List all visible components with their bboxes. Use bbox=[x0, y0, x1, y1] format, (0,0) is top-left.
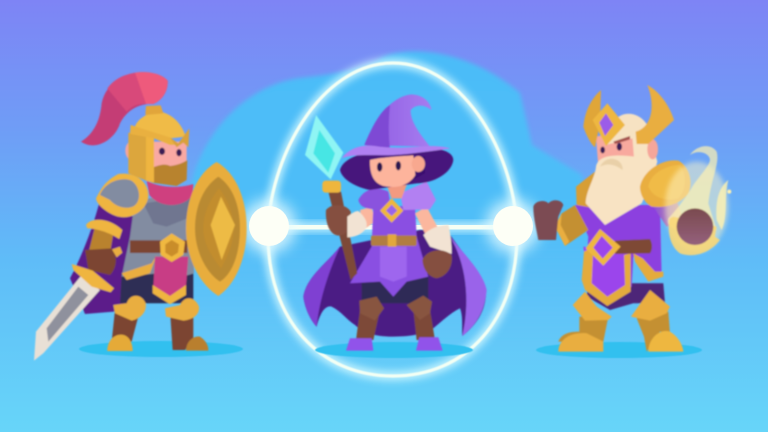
left energy orb bbox=[242, 199, 296, 253]
legs bbox=[587, 283, 665, 310]
belt bbox=[130, 240, 187, 253]
left fist bbox=[533, 200, 563, 240]
knees bbox=[359, 297, 384, 321]
right hand bbox=[422, 250, 452, 278]
neck bbox=[387, 185, 407, 198]
horizontal beam bbox=[268, 222, 513, 232]
staff crystal bbox=[305, 115, 343, 179]
crown gem bbox=[593, 103, 625, 146]
character: paladin bbox=[533, 85, 731, 352]
plume bbox=[81, 73, 168, 145]
character: wizard bbox=[303, 94, 487, 351]
hat brim back bbox=[340, 148, 453, 190]
left cuff bbox=[347, 211, 367, 237]
cape bbox=[303, 230, 486, 337]
right cuff bbox=[423, 225, 452, 254]
fire glow bbox=[665, 162, 728, 252]
right energy orb bbox=[486, 199, 540, 253]
arms bbox=[360, 207, 375, 230]
belt bbox=[615, 239, 652, 254]
head bbox=[596, 128, 635, 167]
boots bbox=[558, 317, 608, 342]
belt bbox=[371, 235, 417, 246]
ring glow bbox=[268, 63, 517, 376]
boots bbox=[346, 338, 373, 351]
ground shadow: warrior bbox=[79, 341, 243, 357]
tunic bbox=[350, 205, 428, 297]
gem belt buckle bbox=[586, 229, 621, 266]
eyes bbox=[159, 148, 165, 155]
legs bbox=[362, 270, 428, 303]
eyes bbox=[600, 147, 605, 153]
shield bbox=[186, 162, 247, 296]
cape bbox=[70, 200, 133, 314]
head bbox=[135, 142, 187, 173]
helmet bbox=[133, 112, 186, 138]
legs bbox=[112, 310, 140, 342]
hair bbox=[410, 157, 425, 182]
right pauldron bbox=[640, 160, 691, 207]
hat cone bbox=[364, 94, 432, 147]
small flame bbox=[716, 180, 728, 230]
scarf bbox=[147, 181, 193, 205]
belt buckle bbox=[160, 233, 185, 262]
shoulder pauldron bbox=[96, 174, 148, 217]
loincloth bbox=[153, 257, 188, 300]
right forearm bbox=[653, 200, 683, 227]
sword guard bbox=[72, 264, 114, 292]
glowing magic ring bbox=[242, 63, 540, 376]
bald crown bbox=[605, 114, 648, 145]
beard bbox=[586, 156, 657, 225]
robe bbox=[575, 205, 662, 305]
collar shoulders bbox=[358, 189, 392, 212]
boots bbox=[107, 335, 133, 351]
hand bbox=[85, 248, 116, 275]
ring line bbox=[268, 63, 517, 376]
main flame bbox=[668, 146, 717, 230]
arm bbox=[88, 227, 113, 253]
flame ring around fist bbox=[669, 217, 720, 255]
blue cloud shape behind the wizard bbox=[180, 51, 600, 340]
sword blade bbox=[34, 275, 100, 361]
face bbox=[370, 155, 415, 187]
spark bbox=[727, 190, 731, 194]
character: warrior bbox=[34, 72, 247, 361]
torso armor bbox=[122, 193, 194, 277]
amulet bbox=[380, 198, 403, 223]
knee guards bbox=[113, 296, 146, 321]
ground shadow: wizard bbox=[315, 342, 473, 358]
left hand bbox=[326, 205, 351, 236]
beard bbox=[152, 160, 187, 186]
knee guards bbox=[573, 292, 612, 321]
right horn bbox=[636, 85, 674, 144]
left arm and shoulder bbox=[576, 172, 595, 208]
eyes bbox=[377, 162, 382, 172]
left horn bbox=[583, 90, 601, 147]
hair band bbox=[632, 127, 657, 170]
ground shadow: paladin bbox=[536, 342, 702, 358]
hat brim bbox=[342, 146, 450, 158]
fire ball fist bbox=[677, 208, 713, 245]
staff bbox=[328, 192, 357, 280]
